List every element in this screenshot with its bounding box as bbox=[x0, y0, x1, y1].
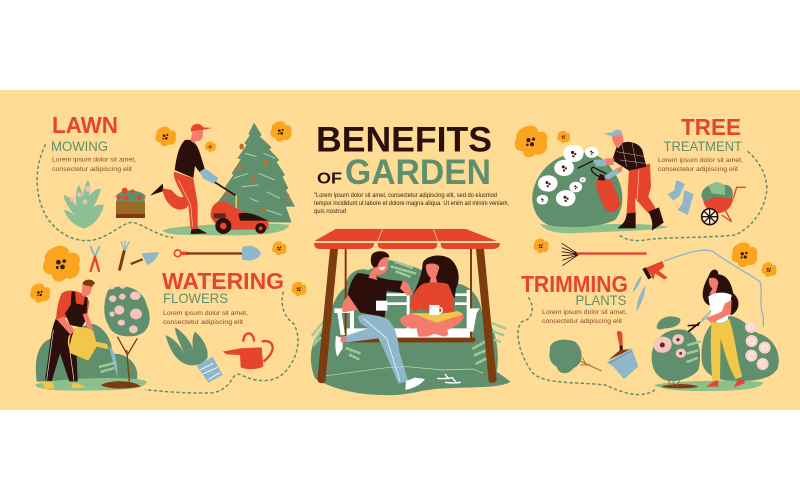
heading: watering flowers: WATERING bbox=[162, 268, 284, 294]
text block: watering flowers: Lorem ipsum dolor sit amet, bbox=[163, 310, 248, 317]
illustration: trimming plants bbox=[518, 239, 779, 395]
heading: lawn mowing: LAWN bbox=[52, 112, 118, 138]
swing bench bbox=[334, 290, 480, 338]
swing seat beam bbox=[342, 338, 475, 342]
flowering tree bbox=[104, 285, 150, 382]
figure: man spraying bbox=[578, 130, 664, 231]
title: GARDEN bbox=[345, 153, 491, 192]
dashed route: lawn bbox=[37, 144, 173, 241]
figure: woman bbox=[400, 255, 464, 337]
soil bbox=[101, 381, 141, 389]
icon: flowering plant bbox=[64, 180, 104, 229]
text block: lawn mowing bbox=[52, 156, 136, 173]
figure: man bbox=[335, 251, 425, 390]
text block: trimming plants bbox=[542, 309, 627, 325]
title: OF bbox=[317, 170, 342, 188]
text block: watering flowers: consectetur adipiscing elit bbox=[163, 319, 243, 326]
icon: hose and nozzle bbox=[632, 250, 763, 327]
heading: tree treatment: TREATMENT bbox=[664, 138, 742, 154]
dashed route: trimming bbox=[518, 297, 655, 395]
text block: tree treatment: consectetur adipiscing elit bbox=[658, 166, 738, 173]
heading: tree treatment: TREE bbox=[681, 114, 741, 140]
swing frame bbox=[317, 249, 497, 383]
ground bbox=[162, 223, 289, 235]
swing canopy bbox=[314, 229, 500, 249]
icon: hand fork bbox=[120, 241, 129, 269]
icon: shovel bbox=[174, 246, 261, 260]
heading: trimming plants: TRIMMING bbox=[521, 271, 628, 297]
leaf speckle bbox=[100, 363, 113, 372]
text block: lawn mowing: Lorem ipsum dolor sit amet, bbox=[52, 156, 136, 164]
figure: man watering bbox=[42, 280, 108, 389]
icon: trowel in pot bbox=[607, 331, 638, 379]
panel: watering flowers bbox=[30, 241, 306, 393]
icon: flower crate bbox=[116, 188, 146, 218]
icon: rake bbox=[562, 243, 647, 266]
dashed route: tree bbox=[618, 151, 767, 241]
illustration: lawn mowing bbox=[37, 121, 295, 241]
foliage bbox=[313, 262, 505, 363]
heading: lawn mowing: MOWING bbox=[51, 138, 108, 154]
icon: wheelbarrow bbox=[702, 182, 746, 225]
heading: watering flowers: FLOWERS bbox=[163, 290, 228, 306]
title bbox=[316, 120, 492, 192]
ground bbox=[35, 378, 147, 391]
text block: trimming plants: consectetur adipiscing elit bbox=[542, 318, 622, 325]
text block: intro: tempor incididunt ut labore et dolore magna aliqua. Ut enim ad minim veniam, bbox=[314, 201, 509, 207]
back bush bbox=[702, 316, 779, 381]
soil bbox=[661, 384, 698, 388]
water stream bbox=[109, 346, 118, 378]
heading: lawn mowing bbox=[51, 112, 118, 154]
icon: potted plant bbox=[166, 327, 223, 383]
heading: watering flowers bbox=[162, 268, 284, 306]
icon: slippers bbox=[437, 374, 461, 383]
background band bbox=[0, 90, 800, 410]
lawn line bbox=[326, 367, 483, 376]
heading: trimming plants bbox=[521, 271, 628, 308]
text block: trimming plants: Lorem ipsum dolor sit amet, bbox=[542, 309, 627, 316]
illustration: watering flowers bbox=[30, 241, 306, 393]
icon: pruner bbox=[91, 247, 99, 271]
text block: watering flowers bbox=[163, 310, 248, 326]
figure: woman trimming bbox=[688, 269, 745, 387]
dashed route: watering bbox=[145, 292, 298, 393]
panel: lawn mowing bbox=[37, 112, 295, 241]
background bush bbox=[36, 323, 137, 382]
text block: tree treatment: Lorem ipsum dolor sit amet, bbox=[658, 157, 743, 164]
heading: tree treatment bbox=[664, 114, 742, 154]
illustration: tree treatment bbox=[515, 126, 767, 241]
text block: intro: "Lorem ipsum dolor sit amet, consectetur adipiscing elit, sed do eiusmod bbox=[314, 193, 497, 199]
icon: red watering can bbox=[223, 333, 273, 369]
garden backdrop bbox=[311, 260, 511, 395]
illustration: couple on swing bbox=[311, 229, 511, 395]
text block: tree treatment bbox=[658, 157, 743, 173]
figure: man mowing bbox=[150, 124, 268, 234]
trimmed bush bbox=[652, 316, 700, 386]
heading: trimming plants: PLANTS bbox=[576, 292, 626, 308]
icon: rubber boots bbox=[668, 180, 694, 215]
pale roses bbox=[745, 321, 771, 370]
panel: trimming plants bbox=[518, 239, 779, 395]
ground bbox=[540, 224, 668, 233]
flowers bbox=[515, 126, 570, 157]
text block: intro bbox=[314, 193, 509, 215]
icon: fir tree bbox=[217, 123, 295, 223]
text block: intro: quis nostrud bbox=[314, 209, 346, 215]
ground bbox=[654, 381, 763, 391]
text block: lawn mowing: consectetur adipiscing elit bbox=[52, 166, 132, 173]
panel: tree treatment bbox=[515, 114, 767, 241]
icon: trowel bbox=[131, 252, 159, 265]
title: BENEFITS bbox=[316, 120, 492, 160]
white flowered bush bbox=[532, 145, 622, 227]
flowers bbox=[155, 121, 292, 152]
flowers bbox=[533, 239, 777, 277]
panel: central title and swing bbox=[311, 120, 511, 395]
icon: cut shrub bbox=[549, 340, 602, 373]
flowers bbox=[30, 241, 306, 303]
